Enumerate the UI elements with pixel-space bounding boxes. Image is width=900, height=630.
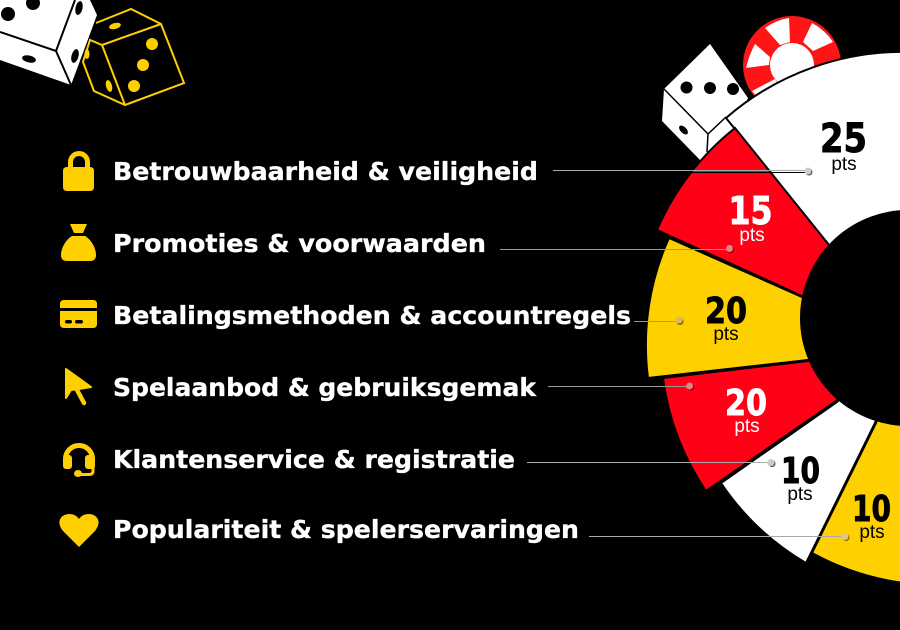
- label: 10 pts white: [781, 451, 820, 505]
- connector 2: [500, 245, 734, 253]
- heading: Betalingsmethoden: Betalingsmethoden & accountregels: [113, 301, 631, 330]
- segment: red 20: [663, 318, 900, 491]
- icon: credit card: [60, 300, 97, 328]
- connector lines: [500, 168, 850, 541]
- label: 20 pts red: 20: [725, 383, 767, 424]
- label: 25 pts: 25: [820, 116, 867, 162]
- label: 25 pts: [820, 116, 867, 175]
- wheel labels: [705, 116, 891, 543]
- connector 5: [527, 459, 776, 467]
- icon: lock: [63, 154, 94, 191]
- label: 20 pts yellow: pts: [713, 324, 739, 345]
- label: 10 pts white: 10: [781, 451, 820, 492]
- label: 10 pts white: pts: [787, 484, 813, 505]
- icon: money bag: [61, 224, 96, 261]
- icon: heart: [59, 514, 99, 547]
- label: 10 pts yellow: pts: [859, 522, 885, 543]
- label: 20 pts red: [725, 383, 767, 437]
- icon: headset: [63, 446, 95, 477]
- chart: points wheel: [646, 52, 900, 584]
- heading: Populariteit: Populariteit & spelerservaringen: [113, 515, 579, 544]
- segment: white 25: [726, 52, 900, 318]
- label: 20 pts yellow: 20: [705, 291, 747, 332]
- heading: Spelaanbod: Spelaanbod & gebruiksgemak: [113, 373, 537, 402]
- connector 4: [548, 382, 694, 390]
- icon: cursor: [66, 369, 91, 403]
- label: 20 pts red: pts: [734, 416, 760, 437]
- segment: red 15: [657, 128, 900, 318]
- inner circle: [800, 210, 900, 426]
- label: 25 pts: pts: [831, 154, 857, 175]
- label: 10 pts yellow: [852, 489, 891, 543]
- icon: casino chip: [743, 16, 841, 114]
- heading: Betrouwbaarheid: Betrouwbaarheid & veiligheid: [113, 157, 538, 186]
- icon: white die top left: [0, 0, 97, 85]
- heading: Promoties: Promoties & voorwaarden: [113, 229, 486, 258]
- label: 15 pts: pts: [739, 225, 765, 246]
- label: 15 pts: 15: [728, 189, 772, 233]
- icon: white die right: [662, 44, 748, 160]
- label: 20 pts yellow: [705, 291, 747, 345]
- label: 15 pts: [728, 189, 772, 246]
- connector 1: [553, 168, 812, 176]
- connector 6: [589, 533, 850, 541]
- icon: yellow outline die: [83, 9, 184, 105]
- connector 3: [634, 316, 684, 325]
- heading: Klantenservice: Klantenservice & registratie: [113, 445, 515, 474]
- segment: yellow 20: [646, 238, 900, 378]
- segment: yellow 10: [812, 318, 900, 584]
- segment: white 10: [721, 318, 900, 563]
